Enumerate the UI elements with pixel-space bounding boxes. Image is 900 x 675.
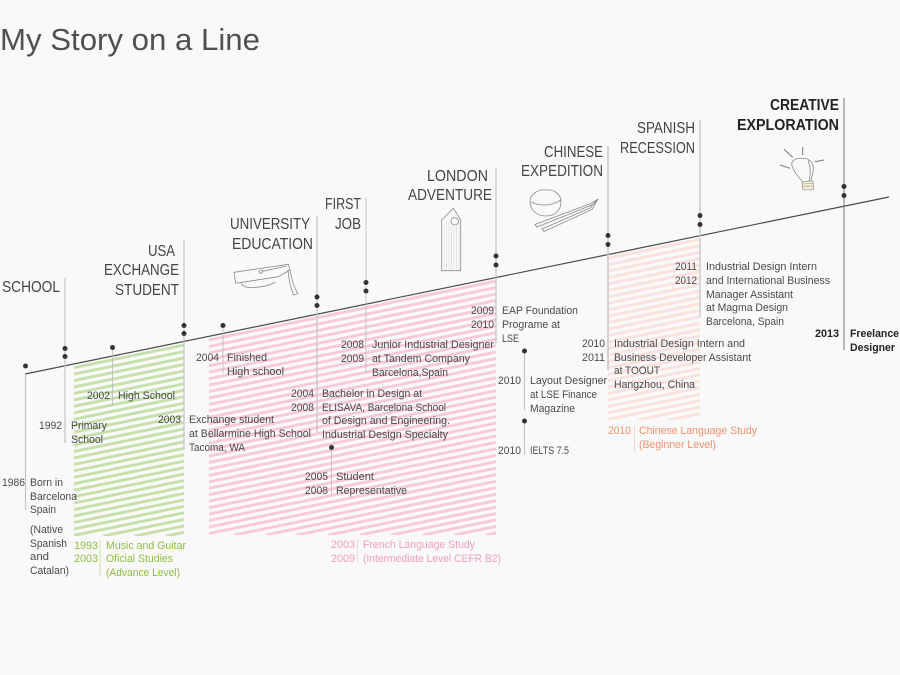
event: university education 2004-2008: 2004: [291, 388, 314, 400]
event: first job 2008-2009: 2009: [341, 353, 364, 365]
icon: tag: [442, 208, 461, 271]
event: IELTS 2010: [498, 418, 569, 457]
event: USA exchange student 2003: Exchange student: [189, 414, 274, 426]
event: born 1986: (Native: [30, 524, 63, 536]
event: creative exploration 2013: [737, 97, 899, 354]
event: first job 2008-2009: Barcelona,Spain: [372, 367, 448, 379]
legend: Chinese language study: 2010: [608, 425, 631, 437]
event: Spanish recession 2011-2012: Barcelona, Spain: [706, 316, 784, 328]
green striped band: music studies: [73, 345, 185, 536]
event: born 1986: Spanish: [30, 538, 67, 550]
event: student representative 2005-2008: Student: [336, 471, 374, 483]
event: born 1986: 1986: [2, 477, 25, 489]
event: USA exchange student 2003: 2003: [158, 414, 181, 426]
event: Chinese expedition 2010-2011: 2011: [582, 352, 605, 364]
event: USA exchange student 2003: USA: [148, 243, 176, 260]
event: high school 2002: High School: [118, 390, 175, 402]
legend: music studies: Oficial Studies: [106, 553, 174, 565]
event: Chinese expedition 2010-2011: Industrial Design Intern and: [614, 338, 745, 350]
event: university education 2004-2008: ELISAVA, Barcelona School: [322, 402, 446, 414]
event: IELTS 2010: IELTS 7.5: [530, 445, 569, 457]
event: layout designer 2010: 2010: [498, 375, 521, 387]
event: USA exchange student 2003: STUDENT: [115, 282, 179, 299]
event: Spanish recession 2011-2012: Manager Assistant: [706, 289, 793, 301]
event: Spanish recession 2011-2012: [620, 120, 831, 328]
event: school, primary school 1992: [2, 278, 108, 446]
event: school, primary school 1992: SCHOOL: [2, 279, 60, 296]
event: Chinese expedition 2010-2011: EXPEDITION: [521, 163, 603, 180]
event: London adventure 2009-2010: 2009: [471, 305, 494, 317]
event: layout designer 2010: Layout Designer: [530, 375, 607, 387]
event: finished high school 2004: High school: [227, 366, 284, 378]
event: born 1986: Catalan): [30, 565, 69, 577]
legend: music studies: Music and Guitar: [106, 540, 186, 552]
event: university education 2004-2008: Bachelor in Design at: [322, 388, 422, 400]
icon: graduation cap: [234, 264, 298, 295]
legend: French language study: 2009: [331, 553, 355, 565]
event: finished high school 2004: [196, 323, 284, 378]
event: Chinese expedition 2010-2011: CHINESE: [544, 144, 603, 161]
event: Chinese expedition 2010-2011: Hangzhou, China: [614, 379, 695, 391]
event: student representative 2005-2008: Representative: [336, 485, 407, 497]
event: university education 2004-2008: [230, 216, 450, 441]
event: school, primary school 1992: 1992: [39, 420, 62, 432]
event: London adventure 2009-2010: EAP Foundation: [502, 305, 578, 317]
event: creative exploration 2013: Designer: [850, 342, 896, 354]
event: born 1986: Spain: [30, 504, 56, 516]
event: first job 2008-2009: JOB: [335, 216, 361, 233]
event: IELTS 2010: 2010: [498, 445, 521, 457]
event: student representative 2005-2008: [305, 445, 407, 497]
event: Spanish recession 2011-2012: RECESSION: [620, 140, 695, 157]
legend: French language study: 2003: [331, 539, 355, 551]
event: born 1986: Barcelona: [30, 491, 77, 503]
event: creative exploration 2013: EXPLORATION: [737, 117, 839, 134]
event: London adventure 2009-2010: LONDON: [427, 168, 488, 185]
title: My Story on a Line: [0, 23, 260, 57]
event: university education 2004-2008: EDUCATION: [232, 236, 313, 253]
event: Spanish recession 2011-2012: 2012: [675, 275, 697, 287]
event: university education 2004-2008: of Design and Engineering.: [322, 415, 450, 427]
legend: music studies: 2003: [74, 553, 98, 565]
legend: music studies: [74, 540, 186, 579]
event: Spanish recession 2011-2012: 2011: [675, 261, 697, 273]
event: Spanish recession 2011-2012: Industrial Design Intern: [706, 261, 817, 273]
event: high school 2002: [87, 345, 175, 405]
event: high school 2002: 2002: [87, 390, 110, 402]
event: finished high school 2004: 2004: [196, 352, 219, 364]
legend: French language study: [331, 539, 501, 565]
event: Chinese expedition 2010-2011: at TOOUT: [614, 365, 660, 377]
main timeline line: [25, 197, 889, 374]
event: USA exchange student 2003: Tacoma, WA: [189, 442, 246, 454]
event: school, primary school 1992: School: [71, 434, 103, 446]
event: creative exploration 2013: Freelance: [850, 328, 899, 340]
pink striped band: French study: [208, 281, 497, 535]
legend: music studies: (Advance Level): [106, 567, 180, 579]
legend: French language study: French Language Study: [363, 539, 476, 551]
event: creative exploration 2013: CREATIVE: [770, 97, 839, 114]
event: student representative 2005-2008: 2008: [305, 485, 328, 497]
event: London adventure 2009-2010: Programe at: [502, 319, 560, 331]
event: university education 2004-2008: Industrial Design Specialty: [322, 429, 449, 441]
event: London adventure 2009-2010: ADVENTURE: [408, 187, 492, 204]
event: born 1986: and: [30, 551, 49, 563]
icon: rice bowl and chopsticks: [530, 190, 598, 232]
event: school, primary school 1992: Primary: [71, 420, 108, 432]
event: student representative 2005-2008: 2005: [305, 471, 328, 483]
event: first job 2008-2009: 2008: [341, 339, 364, 351]
event: first job 2008-2009: at Tandem Company: [372, 353, 471, 365]
orange striped band: Chinese study: [607, 239, 701, 420]
event: first job 2008-2009: FIRST: [325, 196, 361, 213]
event: layout designer 2010: [498, 348, 607, 415]
event: London adventure 2009-2010: 2010: [471, 319, 494, 331]
event: layout designer 2010: at LSE Finance: [530, 389, 597, 401]
event: born 1986: [2, 364, 77, 577]
event: Chinese expedition 2010-2011: Business Developer Assistant: [614, 352, 751, 364]
legend: Chinese language study: Chinese Language Study: [639, 425, 758, 437]
event: university education 2004-2008: UNIVERSITY: [230, 216, 310, 233]
event: first job 2008-2009: [325, 196, 494, 379]
event: Spanish recession 2011-2012: and International Business: [706, 275, 831, 287]
legend: French language study: (Intermediate Level CEFR B2): [363, 553, 501, 565]
event: Chinese expedition 2010-2011: [521, 144, 751, 391]
legend: Chinese language study: [608, 425, 758, 452]
event: born 1986: Born in: [30, 477, 63, 489]
icon: light bulb: [780, 147, 824, 190]
event: Chinese expedition 2010-2011: 2010: [582, 338, 605, 350]
event: university education 2004-2008: 2008: [291, 402, 314, 414]
event: USA exchange student 2003: [104, 240, 311, 454]
event: London adventure 2009-2010: [408, 168, 578, 345]
event: first job 2008-2009: Junior Industrial Designer: [372, 339, 494, 351]
event: creative exploration 2013: 2013: [815, 328, 839, 340]
legend: Chinese language study: (Beginner Level): [639, 439, 716, 451]
event: layout designer 2010: Magazine: [530, 403, 575, 415]
event: USA exchange student 2003: EXCHANGE: [104, 262, 179, 279]
event: Spanish recession 2011-2012: at Magma Design: [706, 302, 788, 314]
legend: music studies: 1993: [74, 540, 98, 552]
event: Spanish recession 2011-2012: SPANISH: [637, 120, 695, 137]
event: USA exchange student 2003: at Bellarmine High School: [189, 428, 311, 440]
event: finished high school 2004: Finished: [227, 352, 267, 364]
event: London adventure 2009-2010: LSE: [502, 333, 519, 345]
